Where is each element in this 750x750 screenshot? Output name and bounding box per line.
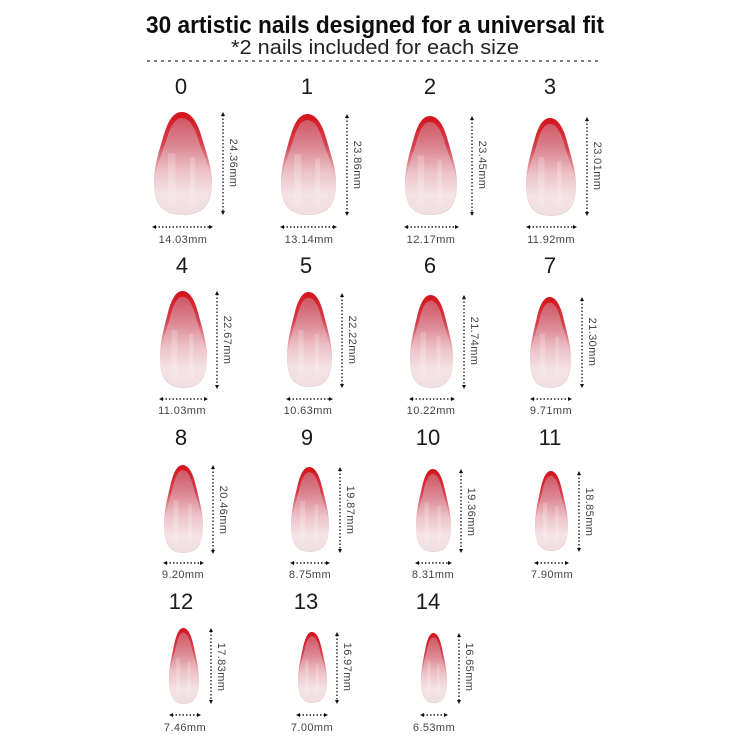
size 13: 13 (294, 589, 318, 614)
size 4 (158, 253, 233, 417)
size 3 (526, 74, 603, 246)
size 9: 19.87mm (344, 486, 356, 534)
size 6: 21.74mm (468, 317, 480, 365)
size 4: 22.67mm (221, 316, 233, 364)
size 7 (530, 253, 598, 417)
size 8: 20.46mm (217, 486, 229, 534)
size 0: 14.03mm (159, 234, 207, 246)
size 5: 10.63mm (284, 405, 332, 417)
title: 30 artistic nails designed for a universal fit (146, 12, 604, 39)
size 10 (412, 425, 477, 581)
size 11: 7.90mm (531, 569, 573, 581)
size 10: 10 (416, 425, 440, 450)
size 10: 8.31mm (412, 569, 454, 581)
size 1: 23.86mm (351, 141, 363, 189)
size 13: 16.97mm (341, 643, 353, 691)
size 12 (164, 589, 227, 734)
size 10: 19.36mm (465, 488, 477, 536)
size 9 (289, 425, 356, 581)
subtitle: *2 nails included for each size (231, 37, 519, 59)
size 5: 22.22mm (346, 316, 358, 364)
size 4: 4 (176, 253, 188, 278)
size 7: 21.30mm (586, 318, 598, 366)
size 8 (162, 425, 229, 581)
size 9: 8.75mm (289, 569, 331, 581)
size 8: 8 (175, 425, 187, 450)
size 14: 16.65mm (463, 643, 475, 691)
size 12: 17.83mm (215, 643, 227, 691)
size 14: 6.53mm (413, 722, 455, 734)
size 1: 13.14mm (285, 234, 333, 246)
size 7: 7 (544, 253, 556, 278)
size 3: 23.01mm (591, 142, 603, 190)
size 6: 10.22mm (407, 405, 455, 417)
size 5: 5 (300, 253, 312, 278)
size 14: 14 (416, 589, 440, 614)
size 2: 2 (424, 74, 436, 99)
size 13 (291, 589, 353, 734)
size 7: 9.71mm (530, 405, 572, 417)
size 11: 18.85mm (583, 488, 595, 536)
size 2: 12.17mm (407, 234, 455, 246)
size 0: 24.36mm (227, 139, 239, 187)
size 1: 1 (301, 74, 313, 99)
size 0: 0 (175, 74, 187, 99)
size 3: 3 (544, 74, 556, 99)
size 9: 9 (301, 425, 313, 450)
size 12: 7.46mm (164, 722, 206, 734)
size 2 (404, 74, 488, 246)
size 2: 23.45mm (476, 141, 488, 189)
size 6: 6 (424, 253, 436, 278)
size 11: 11 (539, 425, 561, 450)
size 8: 9.20mm (162, 569, 204, 581)
size 13: 7.00mm (291, 722, 333, 734)
size 1 (280, 74, 363, 246)
size 12: 12 (169, 589, 193, 614)
size 5 (284, 253, 358, 417)
size 4: 11.03mm (158, 405, 206, 417)
size 6 (407, 253, 480, 417)
size 0 (152, 74, 239, 246)
size 11 (531, 425, 595, 581)
size 3: 11.92mm (527, 234, 575, 246)
size 14 (413, 589, 475, 734)
